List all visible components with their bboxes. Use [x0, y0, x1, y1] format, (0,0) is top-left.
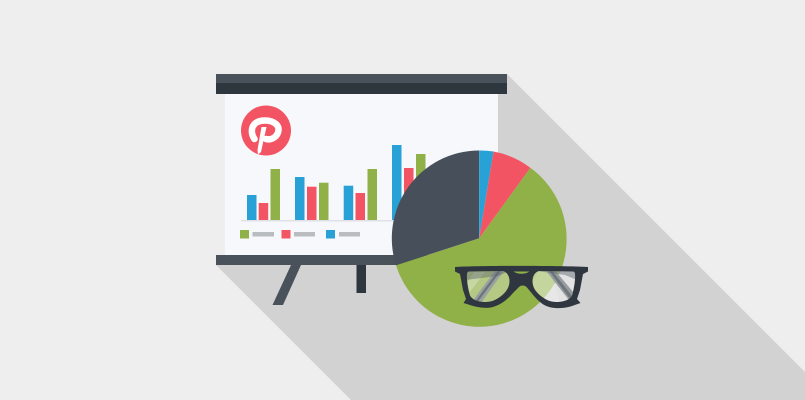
right lens — [532, 271, 575, 302]
bar group 2 — [295, 177, 328, 220]
left lens — [467, 271, 510, 302]
pie slice: dark — [392, 150, 479, 265]
bar chart — [241, 145, 426, 222]
long diagonal shadow — [216, 74, 805, 400]
icon: pinterest logo — [241, 106, 291, 156]
screen top roller — [216, 74, 507, 94]
chart baseline — [241, 220, 401, 222]
glasses frame — [455, 266, 588, 308]
panel: projection screen — [216, 74, 507, 265]
chart legend — [240, 230, 360, 238]
icon: glasses — [455, 265, 588, 308]
pie slice: red — [479, 152, 530, 238]
infographic: presentation board with pie chart and glasses — [216, 74, 805, 400]
bar group 4 — [392, 145, 426, 220]
pie slice: green — [396, 168, 567, 327]
bar group 1 — [247, 169, 280, 220]
bar group 3 — [344, 169, 377, 220]
screen board — [225, 94, 498, 256]
stand leg: right — [356, 265, 366, 293]
pie chart — [392, 150, 567, 327]
stand leg: left — [272, 265, 301, 305]
screen bottom bar — [216, 255, 436, 265]
pie slice: blue — [479, 150, 494, 238]
